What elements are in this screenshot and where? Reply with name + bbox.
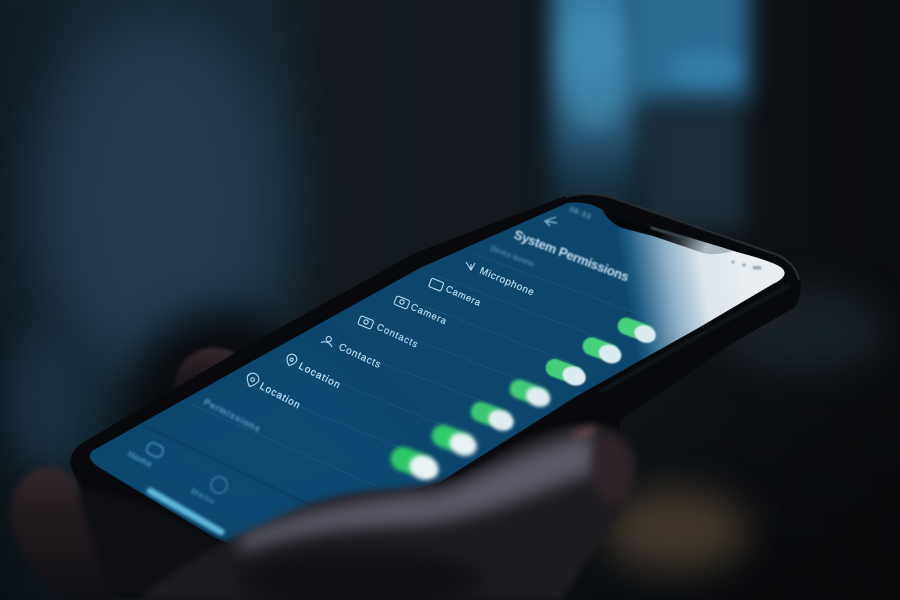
- phone screen: [80, 195, 800, 550]
- toggle 6: [428, 422, 480, 459]
- speaker: [652, 228, 684, 238]
- section label: permissions: Permissions: [202, 397, 262, 434]
- screen lower-left tint: [136, 424, 140, 426]
- tab bar: [126, 441, 230, 506]
- toggle switches: [387, 315, 659, 484]
- title: System Permissions: [512, 227, 631, 285]
- home indicator bar: [150, 491, 221, 532]
- thumb highlight band: [240, 434, 600, 555]
- row: location 2: Location: [258, 381, 302, 411]
- toggle 4: [507, 377, 553, 410]
- back arrow: [545, 217, 557, 226]
- tab: menu: Menu: [189, 486, 217, 506]
- status icons: [731, 260, 761, 270]
- thumb nail: [587, 434, 637, 506]
- row: camera 2: Camera: [409, 302, 449, 327]
- phone body: [70, 193, 801, 598]
- icon: location pin: [246, 372, 260, 388]
- icon: camera: [394, 296, 410, 309]
- blurred bright window: [552, 0, 750, 230]
- row dividers: [190, 254, 650, 488]
- section label: Device access: [489, 245, 535, 269]
- row: contacts 1: Contacts: [375, 322, 419, 350]
- left finger: [10, 467, 110, 598]
- list items: [258, 266, 536, 411]
- tab bar divider: [143, 424, 308, 504]
- icon: location pin: [286, 354, 298, 366]
- row icons: [244, 262, 475, 389]
- toggle 7: [387, 444, 443, 484]
- row: contacts 2: Contacts: [337, 342, 382, 371]
- row: location 1: Location: [297, 361, 342, 391]
- thumb foreground: [130, 420, 650, 600]
- row: microphone: Microphone: [478, 266, 536, 299]
- knuckle tone: [570, 421, 600, 443]
- status bar time: 06:33: [568, 206, 591, 221]
- notch: [602, 210, 734, 254]
- icon: person: [320, 336, 332, 348]
- toggle 1: [616, 316, 657, 344]
- toggle 2: [582, 336, 622, 364]
- tab: home: Home: [126, 449, 154, 469]
- icon: microphone: [466, 262, 475, 270]
- icon: contact card: [358, 316, 374, 329]
- toggle 3: [544, 358, 587, 387]
- thumb shadow: [230, 550, 490, 600]
- row: camera 1: Camera: [444, 284, 483, 309]
- lower hand shadow: [45, 488, 228, 598]
- toggle 5: [468, 399, 517, 434]
- finger behind phone: [174, 348, 242, 410]
- icon: square: [429, 278, 444, 291]
